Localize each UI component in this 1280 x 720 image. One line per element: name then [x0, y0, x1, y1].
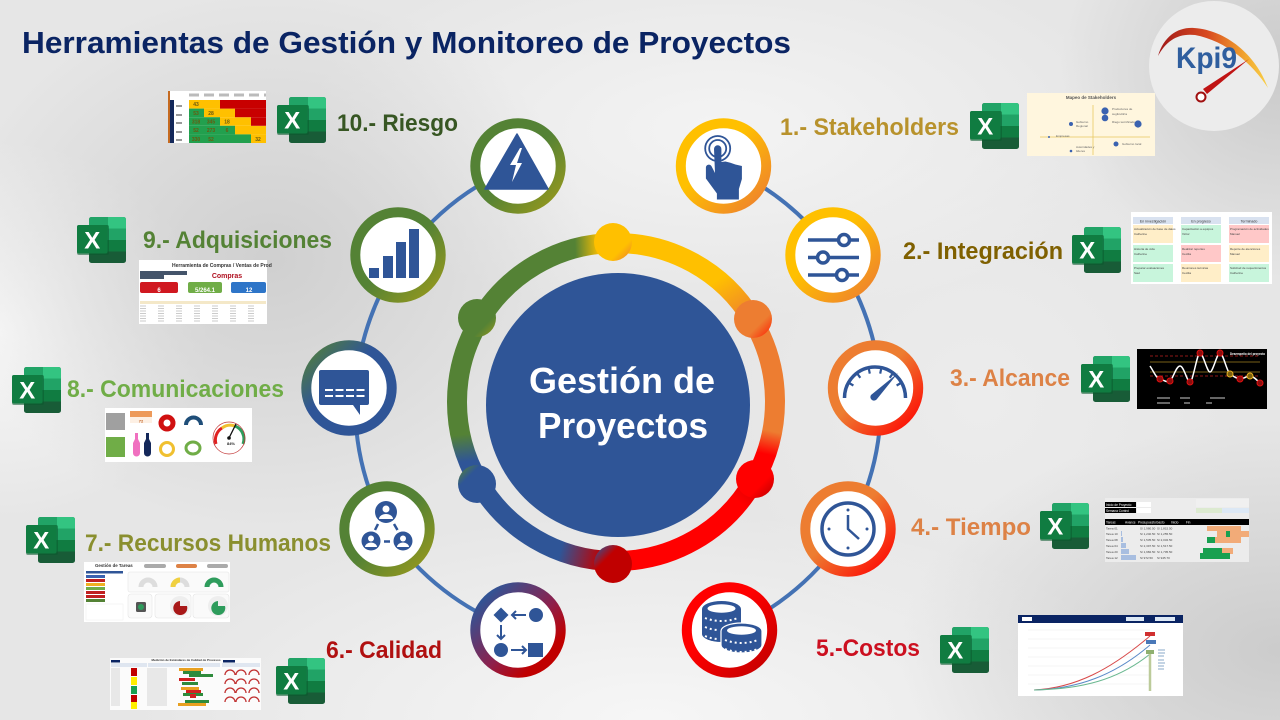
- thumbnail: gantt table: Tarea 08: [1106, 538, 1118, 542]
- icon: excel 7: [26, 517, 75, 563]
- thumbnail: stakeholder map: Productores de: [1112, 107, 1133, 111]
- icon: excel 2: X: [1079, 238, 1095, 264]
- thumbnail: gantt table: Tarea 01: [1106, 526, 1118, 530]
- thumbnail: gantt table: Inicio de Proyecto: [1106, 503, 1132, 507]
- label: 3 Alcance: 3.- Alcance: [950, 365, 1070, 392]
- thumbnail: kanban board: Reuniones técnicas: [1182, 266, 1209, 270]
- thumbnail: stakeholder map: líderes: [1076, 149, 1086, 153]
- thumbnail: gantt table: Gasto: [1156, 520, 1165, 524]
- thumbnail: gantt table: S/ 1,980.50: [1140, 526, 1156, 530]
- thumbnail: risk matrix: 32: [255, 137, 261, 143]
- thumbnail: kanban board: Solicitud de requerimientos: [1230, 266, 1267, 270]
- thumbnail: stakeholder map: [1027, 93, 1155, 156]
- thumbnail: stakeholder map: Empresas: [1056, 134, 1070, 138]
- label: 8 Comunicaciones: 8.- Comunicaciones: [67, 376, 284, 403]
- label: 7 Recursos Humanos: 7.- Recursos Humanos: [85, 530, 331, 557]
- thumbnail: purchases dashboard: 5/264.1: [195, 288, 216, 294]
- thumbnail: gantt table: Presupuesto: [1138, 520, 1156, 524]
- thumbnail: task dashboard: Gestión de Tareas: [95, 563, 133, 568]
- thumbnail: gantt table: S/ 1,535.50: [1140, 538, 1156, 542]
- thumbnail: kanban board: Victor: [1182, 232, 1190, 236]
- thumbnail: risk matrix: 18: [224, 120, 230, 126]
- icon: excel 9: [77, 217, 126, 263]
- thumbnail: gantt table: S/ 972.50: [1140, 556, 1153, 560]
- center hub: Proyectos: [538, 405, 708, 446]
- thumbnail: gantt table: S/ 2,032.50: [1157, 538, 1173, 542]
- icon: people network (7 Recursos Humanos): [344, 486, 430, 572]
- thumbnail: stakeholder map: Autoridades y: [1076, 145, 1095, 149]
- thumbnail: kanban board: Manuel: [1230, 232, 1240, 236]
- thumbnail: communications dashboard: 84%: [227, 441, 235, 446]
- thumbnail: stakeholder map: Mapeo de Stakeholders: [1066, 95, 1117, 100]
- icon: excel 1: [970, 103, 1019, 149]
- thumbnail: gantt table: Tarea 12: [1106, 556, 1118, 560]
- ring node: dark red: [594, 545, 632, 583]
- thumbnail: gantt table: S/ 2,397.50: [1140, 544, 1156, 548]
- thumbnail: communications dashboard: 72: [139, 418, 144, 424]
- icon: excel 6: [276, 658, 325, 704]
- logo: Kpi9: [1149, 1, 1279, 131]
- thumbnail: kanban board: En progreso: [1191, 220, 1211, 224]
- icon: excel 1: X: [977, 114, 993, 140]
- thumbnail: purchases dashboard: 6: [157, 288, 161, 294]
- thumbnail: gantt table: Tareas: [1106, 520, 1116, 524]
- center hub: Gestión de: [529, 360, 715, 401]
- icon: flowchart (6 Calidad): [475, 587, 561, 673]
- thumbnail: gantt table: Tarea 20: [1106, 550, 1118, 554]
- icon: warning triangle (10 Riesgo): [475, 123, 561, 209]
- ring node: orange: [734, 300, 772, 338]
- thumbnail: kanban board: Actualización de base de datos: [1134, 227, 1176, 231]
- label: 4 Tiempo: 4.- Tiempo: [911, 514, 1031, 541]
- thumbnail: performance line chart: [1137, 349, 1267, 409]
- thumbnail: performance line chart: Desempeño del proyecto: [1230, 352, 1265, 356]
- ring node: red: [736, 460, 774, 498]
- thumbnail: purchases dashboard: 12: [246, 288, 253, 294]
- thumbnail: risk matrix: 318: [192, 120, 200, 126]
- icon: excel 7: X: [33, 528, 49, 554]
- center hub: [486, 273, 750, 537]
- thumbnail: gantt table: Fin: [1186, 520, 1191, 524]
- thumbnail: cost curve chart: [1018, 615, 1183, 696]
- thumbnail: stakeholder map: Regional: [1076, 124, 1088, 128]
- thumbnail: gantt table: Avance: [1125, 520, 1136, 524]
- icon: excel 4: [1040, 503, 1089, 549]
- thumbnail: communications dashboard: [105, 408, 252, 462]
- icon: excel 6: X: [283, 668, 299, 696]
- thumbnail: risk matrix: 52: [193, 128, 199, 134]
- thumbnail: kanban board: Historia de vida: [1134, 247, 1155, 251]
- thumbnail: kanban board: [1131, 212, 1272, 284]
- thumbnail: quality dashboard: [110, 658, 261, 710]
- thumbnail: risk matrix: 273: [207, 128, 215, 134]
- thumbnail: gantt table: S/ 1,255.50: [1157, 532, 1173, 536]
- thumbnail: kanban board: Catherine: [1134, 252, 1147, 256]
- thumbnail: risk matrix: 53: [193, 111, 199, 117]
- thumbnail: purchases dashboard: [139, 260, 272, 324]
- thumbnail: kanban board: Catherine: [1134, 232, 1147, 236]
- thumbnail: gantt table: Inicio: [1171, 520, 1179, 524]
- label: 1 Stakeholders: 1.- Stakeholders: [780, 114, 959, 141]
- thumbnail: gantt table: S/ 1,982.50: [1140, 550, 1156, 554]
- label: 5 Costos: 5.-Costos: [816, 635, 920, 662]
- thumbnail: kanban board: Cecilia: [1182, 252, 1191, 256]
- thumbnail: stakeholder map: Gobierno: [1076, 120, 1089, 124]
- thumbnail: stakeholder map: Riego tecnificado: [1112, 120, 1135, 124]
- thumbnail: purchases dashboard: Compras: [212, 273, 242, 280]
- label: 10 Riesgo: 10.- Riesgo: [337, 110, 458, 137]
- thumbnail: risk matrix: 330: [192, 137, 200, 143]
- icon: excel 9: X: [84, 228, 100, 254]
- thumbnail: gantt table: S/ 945.70: [1157, 556, 1170, 560]
- icon: excel 10: X: [284, 108, 300, 134]
- thumbnail: kanban board: Terminado: [1241, 220, 1257, 224]
- outer connector arcs: [355, 166, 881, 630]
- thumbnail: kanban board: En investigación: [1140, 220, 1166, 224]
- thumbnail: kanban board: Realizar reportes: [1182, 247, 1205, 251]
- thumbnail: gantt table: Tarea 10: [1106, 532, 1118, 536]
- icon: sliders (2 Integración): [790, 212, 876, 298]
- thumbnail: gantt table: Semana Control: [1106, 509, 1129, 513]
- icon: clock (4 Tiempo): [805, 486, 891, 572]
- thumbnail: risk matrix: [168, 91, 266, 143]
- thumbnail: kanban board: Manuel: [1230, 252, 1240, 256]
- thumbnail: kanban board: Cecilia: [1182, 271, 1191, 275]
- ring node: green: [458, 299, 496, 337]
- thumbnail: gantt table: S/ 1,517.50: [1157, 544, 1173, 548]
- thumbnail: kanban board: Programación de actividades: [1230, 227, 1269, 231]
- thumbnail: stakeholder map: sugilcultiría: [1112, 112, 1127, 116]
- thumbnail: stakeholder map: Gobierno local: [1122, 142, 1142, 146]
- thumbnail: risk matrix: 28: [208, 111, 214, 117]
- icon: excel 5: X: [947, 638, 963, 664]
- icon: hand touch (1 Stakeholders): [681, 123, 766, 209]
- logo: Kpi9: Kpi9: [1176, 42, 1237, 75]
- icon: gauge (3 Alcance): [833, 345, 918, 431]
- thumbnail: kanban board: Preparar evaluaciones: [1134, 266, 1165, 270]
- thumbnail: gantt table: [1105, 498, 1249, 562]
- thumbnail: kanban board: Saul: [1134, 271, 1140, 275]
- icon: excel 2: [1072, 227, 1121, 273]
- thumbnail: risk matrix: 6: [226, 128, 229, 134]
- thumbnail: gantt table: Tarea 04: [1106, 544, 1118, 548]
- label: 6 Calidad: 6.- Calidad: [326, 637, 442, 664]
- thumbnail: task dashboard: [84, 562, 230, 622]
- thumbnail: kanban board: Reporte de atenciones: [1230, 247, 1261, 251]
- icon: excel 4: X: [1047, 514, 1063, 540]
- icon: excel 8: [12, 367, 61, 413]
- ring node: yellow: [594, 223, 632, 261]
- thumbnail: gantt table: S/ 1,240.50: [1140, 532, 1156, 536]
- thumbnail: quality dashboard: Medición de Estándares de Calidad de Procesos: [151, 658, 221, 662]
- thumbnail: kanban board: Capacitación a equipos: [1182, 227, 1214, 231]
- icon: excel 10: [277, 97, 326, 143]
- icon: coins (5 Costos): [687, 587, 772, 673]
- icon: excel 3: [1081, 356, 1130, 402]
- label: 9 Adquisiciones: 9.- Adquisiciones: [143, 227, 332, 254]
- thumbnail: risk matrix: 345: [207, 120, 215, 126]
- ring node: blue: [458, 465, 496, 503]
- thumbnail: gantt table: S/ 1,705.50: [1157, 550, 1173, 554]
- title: Herramientas de Gestión y Monitoreo de Proyectos: [22, 25, 791, 60]
- icon: excel 3: X: [1088, 366, 1104, 394]
- icon: excel 8: X: [19, 378, 35, 404]
- icon: chat bubble (8 Comunicaciones): [306, 345, 392, 431]
- thumbnail: risk matrix: 52: [208, 137, 214, 143]
- central gradient ring: [457, 223, 775, 583]
- icon: bar chart (9 Adquisiciones): [355, 212, 441, 298]
- thumbnail: risk matrix: 43: [193, 102, 199, 108]
- thumbnail: purchases dashboard: Herramienta de Compras / Ventas de Prod: [172, 263, 272, 269]
- thumbnail: gantt table: S/ 1,815.50: [1157, 526, 1173, 530]
- thumbnail: kanban board: Catherine: [1230, 271, 1243, 275]
- label: 2 Integración: 2.- Integración: [903, 238, 1063, 265]
- icon: excel 5: [940, 627, 989, 673]
